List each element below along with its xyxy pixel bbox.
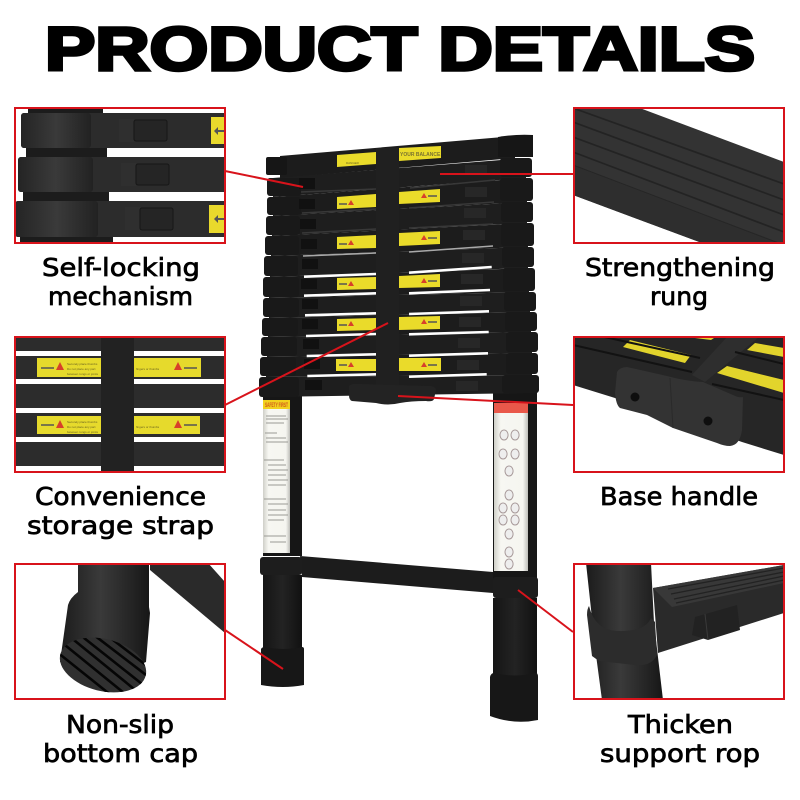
rung gaps [300,180,495,233]
label: convenience storage strap [27,482,214,540]
right end caps [500,158,539,393]
left lock buttons [299,178,322,390]
ladder rungs [265,158,533,397]
panel: convenience storage strap [14,336,225,472]
label: self-locking mechanism: mechanism [48,282,193,311]
panel: convenience storage strap: Do not place any part [67,367,96,371]
panel: base handle [573,336,784,472]
yellow warning labels right: YOUR BALANCE [400,152,441,158]
yellow warning labels left: DANGER [346,161,360,165]
panel: convenience storage strap: Securely place thumbs [67,362,98,366]
label: strengthening rung [585,253,775,311]
left end caps [259,178,301,397]
label: convenience storage strap: Convenience [35,482,206,511]
label: strengthening rung: rung [650,282,708,311]
panel: thicken support rop [573,563,784,700]
connector: strengthening rung [440,173,573,175]
panel: non-slip bottom cap [14,563,225,701]
left upper tube with label: SAFETY FIRST [265,403,288,409]
right lower leg [490,577,538,722]
connector: bottom cap [225,630,283,669]
right upper tube with label [493,390,537,580]
connector: support rop [518,590,573,632]
left lower leg [260,557,304,687]
panel: convenience storage strap: between rungs or joints [67,372,99,376]
label: non-slip bottom cap [43,710,198,768]
yellow warning labels right [399,146,441,371]
support bar [300,556,493,593]
connector: base handle [398,396,573,405]
panel: convenience storage strap: Securely place thumbs [67,420,98,424]
label: base handle: Base handle [600,482,758,511]
panel: convenience storage strap: fingers or thumbs [136,425,160,429]
label: thicken support rop: Thicken [627,710,733,739]
connector: storage strap [225,323,388,405]
connector: self-locking [225,171,303,187]
left upper tube with label [263,390,302,556]
storage strap [376,148,399,385]
label: non-slip bottom cap: Non-slip [66,710,174,739]
title: PRODUCT DETAILS [45,15,755,83]
panel: convenience storage strap: between rungs or joints [67,430,99,434]
panel: convenience storage strap: fingers or thumbs [136,367,160,371]
base handle [349,384,436,404]
label: self-locking mechanism: Self-locking [42,253,200,282]
label: thicken support rop [600,710,760,768]
label: strengthening rung: Strengthening [585,253,775,282]
central telescopic ladder [259,135,539,722]
panel: strengthening rung [573,107,784,250]
label: thicken support rop: support rop [600,739,760,768]
label: non-slip bottom cap: bottom cap [43,739,198,768]
right lock buttons [456,165,487,391]
label: convenience storage strap: storage strap [27,511,214,540]
label: self-locking mechanism [42,253,200,311]
yellow warning labels left [336,152,376,371]
panel: self-locking mechanism [14,107,281,243]
top rung [266,135,533,178]
panel: convenience storage strap: Do not place any part [67,425,96,429]
